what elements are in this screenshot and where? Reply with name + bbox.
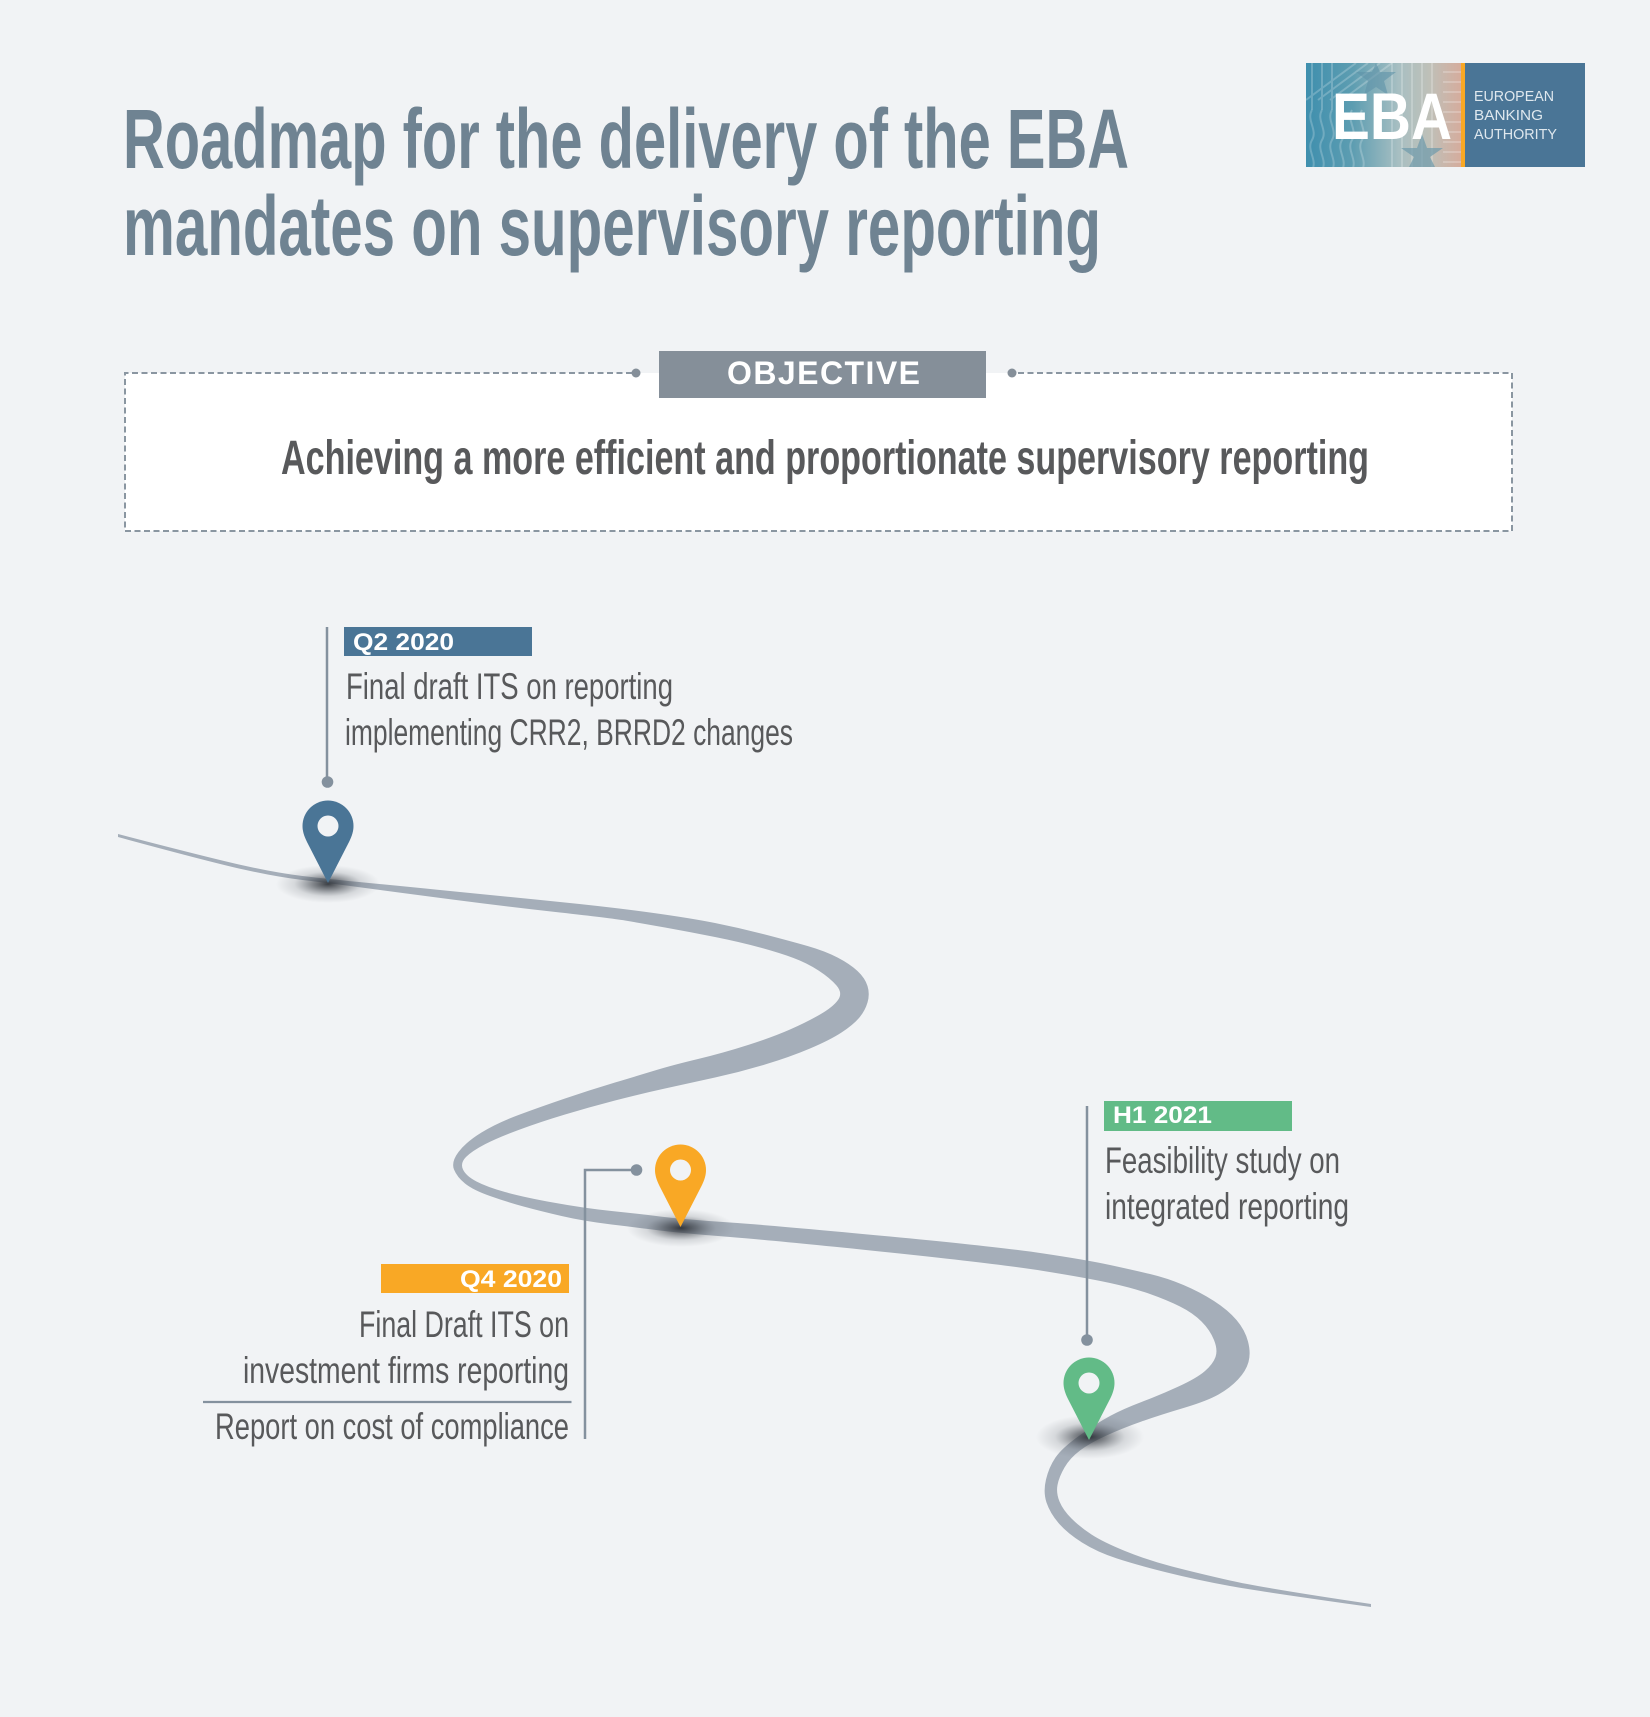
icon: pin Q4 2020 xyxy=(655,1144,706,1227)
text Q4 2020: Report on cost of compliance xyxy=(215,1406,569,1447)
icon: pin H1 2021 xyxy=(1064,1358,1114,1440)
title: mandates on supervisory reporting xyxy=(123,179,1101,273)
tag H1 2021: H1 2021 xyxy=(1113,1102,1212,1129)
title: Roadmap for the delivery of the EBA xyxy=(123,92,1129,186)
tag H1 2021 xyxy=(1104,1101,1292,1131)
text H1 2021 xyxy=(1105,1140,1349,1227)
objective tab xyxy=(659,351,986,398)
tag Q4 2020 xyxy=(381,1264,569,1293)
leader line H1 2021 xyxy=(1081,1106,1093,1346)
text Q4 2020 xyxy=(203,1304,572,1447)
logo: European Banking Authority: EUROPEAN xyxy=(1474,88,1554,105)
text Q4 2020: investment firms reporting xyxy=(243,1350,569,1391)
text H1 2021: Feasibility study on xyxy=(1105,1140,1340,1181)
callout: Q4 2020 xyxy=(203,1164,642,1447)
text H1 2021: integrated reporting xyxy=(1105,1186,1349,1227)
shadow: pin Q2 2020 xyxy=(276,865,380,903)
logo: European Banking Authority: BANKING xyxy=(1474,107,1543,124)
tag Q2 2020: Q2 2020 xyxy=(353,629,454,656)
panel: objective xyxy=(125,351,1512,531)
title xyxy=(123,92,1129,273)
panel: objective: OBJECTIVE xyxy=(727,355,920,391)
road xyxy=(118,834,1371,1607)
shadow: pin Q4 2020 xyxy=(627,1209,735,1247)
logo: European Banking Authority xyxy=(1306,63,1585,170)
logo: European Banking Authority: AUTHORITY xyxy=(1474,126,1557,143)
shadow: pin H1 2021 xyxy=(1036,1415,1144,1459)
icon: pin Q2 2020 xyxy=(302,800,354,883)
text Q2 2020 xyxy=(345,666,793,753)
logo: European Banking Authority: EBA xyxy=(1332,79,1452,153)
callout: H1 2021 xyxy=(1081,1101,1349,1346)
text Q4 2020: Final Draft ITS on xyxy=(359,1304,569,1345)
leader line Q2 2020 xyxy=(322,627,333,788)
leader line Q4 2020 xyxy=(585,1164,642,1439)
tag Q2 2020 xyxy=(344,627,532,656)
text Q2 2020: implementing CRR2, BRRD2 changes xyxy=(345,712,793,753)
tag Q4 2020: Q4 2020 xyxy=(460,1266,562,1293)
callout: Q2 2020 xyxy=(322,627,793,788)
text Q2 2020: Final draft ITS on reporting xyxy=(346,666,673,707)
